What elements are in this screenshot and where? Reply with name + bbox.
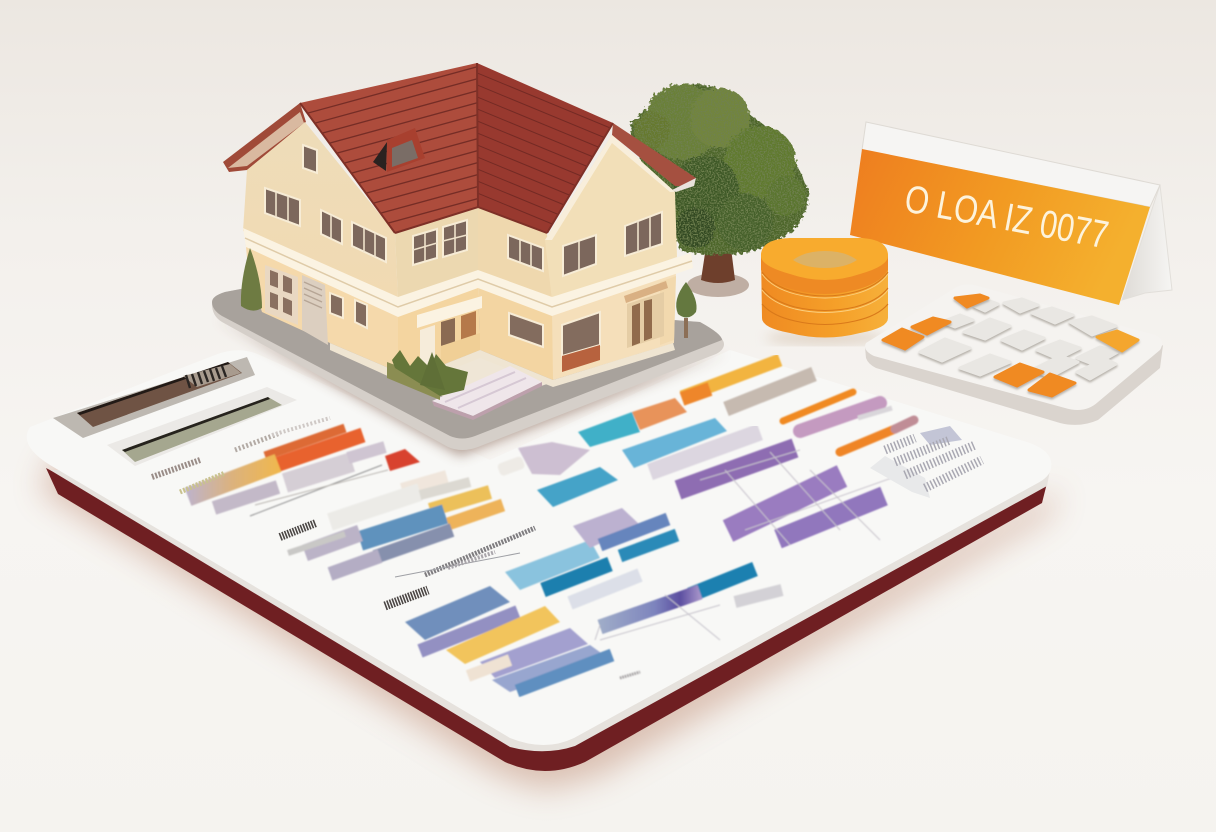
small labels: left table xyxy=(152,418,535,606)
panel: house model xyxy=(212,63,724,450)
calculator top xyxy=(865,284,1162,410)
placard back fold xyxy=(1122,185,1172,300)
color bars: purple chart xyxy=(650,432,900,545)
tree crown xyxy=(630,84,808,255)
sign: loan placard xyxy=(850,122,1172,305)
orange keys xyxy=(883,295,1138,396)
upper display frame xyxy=(53,357,255,438)
ground left wall xyxy=(245,235,398,372)
darker first layer xyxy=(761,256,888,294)
tree base xyxy=(687,273,749,297)
board shadow xyxy=(40,450,1060,790)
tree trunk xyxy=(701,240,735,283)
paper on path xyxy=(432,366,542,420)
placard text: O LOA IZ 0077 xyxy=(901,178,1112,257)
panel: large calculator board xyxy=(27,350,1051,771)
main roof right xyxy=(477,63,613,233)
ground recess left wall xyxy=(398,280,480,378)
lower display xyxy=(107,387,297,466)
color bars: left table xyxy=(188,428,503,574)
board side lip xyxy=(50,470,1050,751)
panel: small calculator xyxy=(865,284,1163,425)
board top surface xyxy=(27,350,1051,745)
upper center right wall xyxy=(478,207,552,300)
red panel below window xyxy=(562,345,600,372)
hatched icon cluster xyxy=(870,426,982,498)
placard white header xyxy=(862,122,1160,207)
white keys xyxy=(920,299,1118,379)
floor cornice xyxy=(243,228,693,317)
left roof eave xyxy=(223,103,306,172)
stack body xyxy=(761,239,888,338)
plinth xyxy=(330,343,675,387)
tree xyxy=(630,84,808,297)
ground floor bay xyxy=(265,265,328,345)
main roof left xyxy=(300,63,478,233)
cone shrub xyxy=(241,248,262,311)
porch xyxy=(417,296,482,372)
ground floor windows xyxy=(330,293,600,356)
ground recess right wall xyxy=(478,280,553,380)
top recess xyxy=(793,251,857,268)
roof ridges xyxy=(300,63,613,233)
right roof eave xyxy=(612,123,696,186)
color bars: center table xyxy=(497,398,782,640)
shadow under house base xyxy=(215,318,728,456)
upper left wall xyxy=(243,122,398,300)
house base slab xyxy=(212,288,724,450)
window mullions xyxy=(276,192,650,270)
board maroon base xyxy=(46,468,1047,771)
placard orange face xyxy=(850,149,1150,305)
windows upper xyxy=(265,145,662,276)
color bars: bottom left table xyxy=(405,586,640,692)
icon: orange coin stack xyxy=(761,238,888,344)
forecourt xyxy=(410,350,553,410)
upper center wall xyxy=(395,207,478,300)
hedge xyxy=(387,350,468,400)
right roof stripes xyxy=(478,73,610,224)
roof dormer xyxy=(373,128,425,172)
upper right wing wall xyxy=(545,135,677,300)
calculator body xyxy=(865,345,1163,425)
right door xyxy=(624,281,668,348)
ground right wing wall xyxy=(552,268,676,380)
layer grooves xyxy=(762,272,888,324)
color bars: upper right xyxy=(682,360,914,452)
left roof stripes xyxy=(308,66,477,224)
top face xyxy=(761,238,888,280)
small tree xyxy=(676,282,697,338)
